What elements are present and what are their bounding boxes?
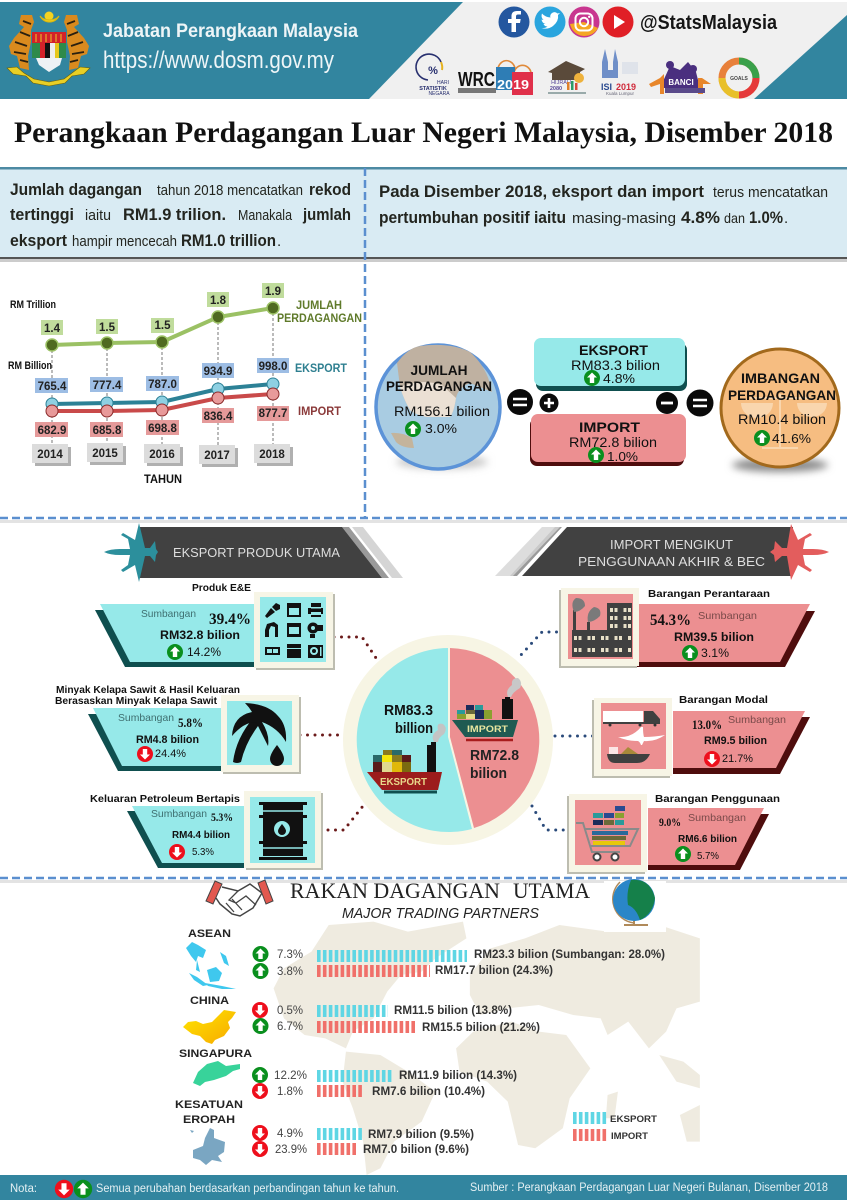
panel: barangan perantaraan: Barangan Perantaraan [648, 588, 770, 600]
pie label: eksport: billion [395, 720, 433, 737]
partner: Kesatuan Eropah: KESATUAN [175, 1099, 243, 1111]
row: Eropah eksport [252, 1125, 474, 1141]
summary text: left: tertinggi [10, 205, 74, 224]
summary text: left: jumlah [302, 205, 351, 224]
panel: minyak kelapa sawit: 5.8% [178, 715, 203, 730]
main title: Perangkaan Perdagangan Luar Negeri Malaysia, Disember 2018 [14, 116, 833, 149]
row: China eksport: RM11.5 bilion (13.8%) [394, 1005, 512, 1017]
series: import: 877.7 [259, 408, 287, 420]
logo: Hari Statistik Negara: NEGARA [428, 91, 450, 97]
footer: Sumber : Perangkaan Perdagangan Luar Negeri Bulanan, Disember 2018 [470, 1182, 828, 1194]
logo: HIJRAH 2080: HIJRAH [551, 80, 571, 86]
series names: IMPORT [298, 404, 342, 418]
circle: imbangan perdagangan: RM10.4 bilion [738, 411, 826, 427]
logo: ISI 2019: 2019 [616, 82, 636, 92]
row: China eksport [252, 1002, 512, 1018]
footer: Nota: [10, 1183, 37, 1195]
line chart: yearly trade [8, 283, 362, 486]
summary text: right: . [784, 210, 788, 227]
icon: Europe map [190, 1128, 225, 1165]
summary text: right: dan [724, 210, 745, 226]
panel: Produk E&E: 14.2% [187, 645, 221, 659]
summary text: left: tahun 2018 mencatatkan [157, 182, 303, 199]
logo: WRC 2019: 2019 [497, 77, 529, 92]
circle: imbangan perdagangan: 41.6% [772, 431, 811, 446]
panel: minyak kelapa sawit: Berasaskan Minyak Kelapa Sawit [55, 695, 217, 707]
series: import [35, 388, 289, 437]
row: Singapura eksport [252, 1067, 517, 1083]
summary text: right: terus mencatatkan [713, 184, 828, 201]
year axis: 2016 [149, 449, 175, 461]
row: Eropah eksport: RM7.9 bilion (9.5%) [368, 1129, 474, 1141]
website: https://www.dosm.gov.my [103, 47, 334, 74]
icon: China map [183, 1010, 236, 1044]
series: import: 685.8 [93, 425, 122, 437]
summary text: right: 1.0% [749, 208, 783, 227]
panel: Produk E&E [95, 582, 335, 670]
icon tile: shopping cart [567, 794, 647, 874]
card: import [530, 414, 686, 466]
series: import: 682.9 [38, 425, 66, 437]
panel: barangan penggunaan: Sumbangan [688, 812, 746, 824]
summary text: left: eksport [10, 231, 67, 250]
panel: minyak kelapa sawit [55, 684, 301, 774]
series: jumlah perdagangan [41, 283, 284, 351]
heading: rakan dagangan utama: UTAMA [513, 878, 590, 903]
panel: minyak kelapa sawit: Minyak Kelapa Sawit & Hasil Keluaran [56, 684, 240, 696]
icon: ASEAN map [186, 942, 236, 989]
summary text: left [10, 180, 351, 250]
card: import: RM72.8 bilion [569, 434, 657, 450]
operators [507, 389, 714, 416]
card: eksport: EKSPORT [579, 342, 648, 358]
row: ASEAN eksport: RM23.3 bilion (Sumbangan: 28.0%) [474, 949, 665, 961]
panel: barangan penggunaan: RM6.6 bilion [678, 833, 737, 845]
heading: rakan dagangan utama [290, 878, 590, 922]
heading: rakan dagangan utama: RAKAN DAGANGAN [290, 878, 500, 903]
row: ASEAN eksport: 7.3% [277, 949, 303, 961]
icon: import ship: IMPORT [467, 724, 508, 735]
pie label: import: RM72.8 [470, 747, 519, 764]
icon tile: oil barrel [244, 791, 323, 870]
logo: ISI 2019: Kuala Lumpur [606, 91, 635, 96]
partner: Singapura: SINGAPURA [179, 1048, 252, 1060]
row: Eropah import [252, 1141, 469, 1157]
row: China import [252, 1018, 540, 1034]
card: eksport: RM83.3 bilion [571, 357, 660, 373]
year axis [32, 443, 293, 467]
row: ASEAN import [252, 963, 553, 979]
logo: Hari Statistik Negara: % [428, 65, 438, 77]
icon tile: electronics [254, 592, 335, 670]
legend: IMPORT [611, 1131, 648, 1142]
series: eksport: 934.9 [204, 366, 232, 378]
card: eksport [534, 338, 687, 391]
circle: imbangan perdagangan: IMBANGAN [741, 370, 820, 386]
summary text: left: Manakala [238, 207, 293, 224]
panel: minyak kelapa sawit: RM4.8 bilion [136, 734, 199, 746]
card: eksport: 4.8% [603, 371, 635, 386]
icon: teal plane [104, 523, 158, 582]
panel: barangan modal: 13.0% [692, 717, 722, 732]
logo: Banci 2020: BANCI [668, 78, 694, 87]
panel: trade balance equation [376, 338, 839, 472]
card: import: IMPORT [579, 419, 640, 435]
circle: jumlah perdagangan: 3.0% [425, 421, 457, 436]
summary text: right: masing-masing [572, 210, 676, 227]
panel: keluaran petroleum: 5.3% [211, 812, 233, 824]
icon: Singapore map [193, 1061, 240, 1086]
icon: eksport ship: EKSPORT [380, 776, 428, 788]
pie label: eksport: RM83.3 [384, 702, 433, 719]
summary text: right: pertumbuhan positif iaitu [379, 208, 566, 227]
connector dots: import [520, 632, 594, 830]
banner: import mengikut penggunaan [495, 524, 829, 580]
circle: imbangan perdagangan [721, 349, 839, 472]
panel: Produk E&E: RM32.8 bilion [160, 628, 240, 642]
panel: barangan perantaraan: Sumbangan [698, 610, 757, 622]
icon: eksport ship [367, 724, 446, 792]
axis labels: TAHUN [144, 472, 182, 486]
year axis: 2014 [37, 449, 63, 461]
world map background [274, 922, 700, 1200]
panel: keluaran petroleum: Sumbangan [151, 808, 207, 820]
row: Singapura eksport: RM11.9 bilion (14.3%) [399, 1070, 517, 1082]
icon tile: palm tree [221, 695, 301, 774]
series: eksport: 765.4 [38, 381, 67, 393]
partner: China [183, 995, 236, 1044]
year axis: 2017 [204, 450, 230, 462]
logo: Hari Statistik Negara [416, 54, 450, 97]
panel: Produk E&E: Sumbangan [141, 608, 196, 620]
series: import: 836.4 [204, 411, 233, 423]
series names: PERDAGANGAN [277, 311, 362, 325]
panel: barangan modal: RM9.5 bilion [704, 735, 767, 747]
icon: globe [604, 879, 666, 932]
summary text: left: . [277, 233, 281, 250]
summary text: right: 4.8% [681, 208, 720, 227]
icon tile: truck, plane, ship [592, 698, 672, 778]
panel: barangan penggunaan: 9.0% [659, 817, 681, 829]
summary text: left: RM1.9 trilion. [123, 205, 226, 224]
connector dots: eksport [300, 637, 378, 830]
logo: ISI 2019 [601, 49, 638, 96]
logo: WRC 2019: WRC [458, 69, 495, 91]
row: ASEAN eksport [252, 946, 665, 962]
panel: barangan perantaraan: 54.3% [650, 612, 691, 629]
pie label: import [470, 747, 519, 782]
circle: jumlah perdagangan [376, 345, 500, 469]
logo: Hari Statistik Negara: HARI [437, 80, 449, 86]
social icons [498, 6, 634, 38]
summary text: left: rekod [309, 180, 351, 199]
row: Singapura eksport: 12.2% [274, 1070, 307, 1082]
banner: eksport produk utama [104, 523, 403, 582]
legend [573, 1114, 657, 1142]
series: jumlah perdagangan: 1.5 [154, 320, 171, 332]
panel: keluaran petroleum: RM4.4 bilion [172, 829, 230, 841]
logo: HIJRAH 2080: 2080 [550, 86, 562, 92]
card: import: 1.0% [607, 449, 638, 464]
logo: WRC 2019 [458, 61, 533, 95]
row: China eksport: 0.5% [277, 1005, 303, 1017]
icon: coat of arms [7, 12, 90, 86]
footer: Semua perubahan berdasarkan perbandingan tahun ke tahun. [96, 1183, 399, 1195]
row: China import: 6.7% [277, 1021, 303, 1033]
panel: barangan perantaraan [559, 588, 815, 668]
partner: China: CHINA [190, 995, 229, 1007]
social handle: @StatsMalaysia [640, 12, 778, 34]
year axis: 2018 [259, 449, 285, 461]
series: eksport: 777.4 [93, 380, 122, 392]
pie chart: eksport vs import [343, 635, 553, 845]
banner: eksport produk utama: EKSPORT PRODUK UTAMA [173, 545, 340, 560]
panel: barangan modal: Barangan Modal [679, 694, 768, 706]
axis labels: RM Trillion [10, 299, 56, 311]
logo: ISI 2019: ISI [601, 82, 612, 92]
series names [277, 298, 362, 418]
panel: barangan perantaraan: RM39.5 bilion [674, 630, 754, 644]
summary text: left: hampir mencecah [72, 233, 177, 250]
row: ASEAN import: RM17.7 bilion (24.3%) [435, 965, 553, 977]
summary text: left: iaitu [85, 207, 111, 224]
panel: barangan perantaraan: 3.1% [701, 646, 729, 660]
row: Singapura import: RM7.6 bilion (10.4%) [372, 1086, 485, 1098]
panel: keluaran petroleum: 5.3% [192, 846, 214, 858]
heading: rakan dagangan utama: MAJOR TRADING PARTNERS [342, 905, 539, 922]
organisation name: Jabatan Perangkaan Malaysia [103, 21, 358, 42]
series: import: 698.8 [148, 423, 177, 435]
series names: JUMLAH [296, 298, 342, 312]
partner: Singapura [179, 1048, 252, 1086]
banner: import mengikut penggunaan: IMPORT MENGIKUT [610, 537, 733, 552]
banner: import mengikut penggunaan: PENGGUNAAN AKHIR & BEC [578, 554, 765, 569]
panel: barangan penggunaan: Barangan Penggunaan [655, 793, 780, 805]
series: jumlah perdagangan: 1.8 [210, 295, 227, 307]
row: China import: RM15.5 bilion (21.2%) [422, 1022, 540, 1034]
series: eksport: 998.0 [259, 361, 287, 373]
row: ASEAN import: 3.8% [277, 966, 303, 978]
axis labels [8, 299, 182, 486]
logo: Hari Statistik Negara: STATISTIK [419, 86, 447, 92]
series: eksport: 787.0 [148, 379, 177, 391]
panel: barangan penggunaan: 5.7% [697, 850, 719, 862]
partner: Kesatuan Eropah [175, 1099, 243, 1165]
circle: jumlah perdagangan: RM156.1 bilion [394, 403, 490, 419]
axis labels: RM Billion [8, 360, 52, 372]
row: Eropah import: RM7.0 bilion (9.6%) [363, 1144, 469, 1156]
icon tile: factory [559, 588, 639, 668]
logo: Banci 2020 [649, 61, 711, 94]
row: Singapura import: 1.8% [277, 1086, 303, 1098]
series: eksport [35, 358, 289, 410]
panel: barangan modal: 21.7% [722, 753, 753, 765]
panel: Produk E&E: 39.4% [209, 611, 251, 628]
icon: red plane [770, 524, 829, 580]
pie label: import: bilion [470, 765, 507, 782]
logo: SDG wheel: GOALS [730, 76, 749, 82]
row: Eropah eksport: 4.9% [277, 1128, 303, 1140]
panel: barangan modal: Sumbangan [728, 714, 786, 726]
icon: import ship [452, 678, 521, 740]
summary text: left: RM1.0 trillion [181, 231, 276, 250]
summary strip [0, 167, 847, 262]
panel: keluaran petroleum: Keluaran Petroleum Bertapis [90, 793, 240, 805]
row: Singapura import [252, 1083, 485, 1099]
circle: jumlah perdagangan: JUMLAH [410, 362, 468, 378]
pie label: eksport [384, 702, 433, 737]
panel: barangan modal [592, 694, 810, 778]
panel: keluaran petroleum [90, 791, 323, 870]
circle: imbangan perdagangan: PERDAGANGAN [728, 387, 836, 403]
header banner [0, 2, 847, 99]
circle: jumlah perdagangan: PERDAGANGAN [386, 378, 492, 394]
partner: ASEAN: ASEAN [188, 928, 231, 940]
partner: Kesatuan Eropah: EROPAH [183, 1114, 235, 1126]
panel: minyak kelapa sawit: 24.4% [155, 748, 186, 760]
summary text: right: Pada Disember 2018, eksport dan import [379, 182, 704, 201]
series: jumlah perdagangan: 1.5 [99, 322, 116, 334]
year axis: 2015 [92, 448, 118, 460]
panel: Produk E&E: Produk E&E [192, 582, 251, 594]
series: jumlah perdagangan: 1.4 [44, 323, 61, 335]
logo: SDG wheel [722, 61, 756, 95]
series: jumlah perdagangan: 1.9 [265, 286, 281, 298]
partner: ASEAN [186, 928, 236, 989]
panel: minyak kelapa sawit: Sumbangan [118, 712, 174, 724]
footer [0, 1175, 847, 1200]
row: Eropah import: 23.9% [275, 1144, 307, 1156]
summary text: right [379, 182, 828, 227]
logo: HIJRAH 2080 [548, 61, 586, 94]
icon: handshake [206, 880, 273, 916]
summary text: left: Jumlah dagangan [10, 180, 142, 199]
legend: EKSPORT [610, 1114, 657, 1125]
panel: barangan penggunaan [567, 793, 780, 874]
series names: EKSPORT [295, 361, 348, 375]
